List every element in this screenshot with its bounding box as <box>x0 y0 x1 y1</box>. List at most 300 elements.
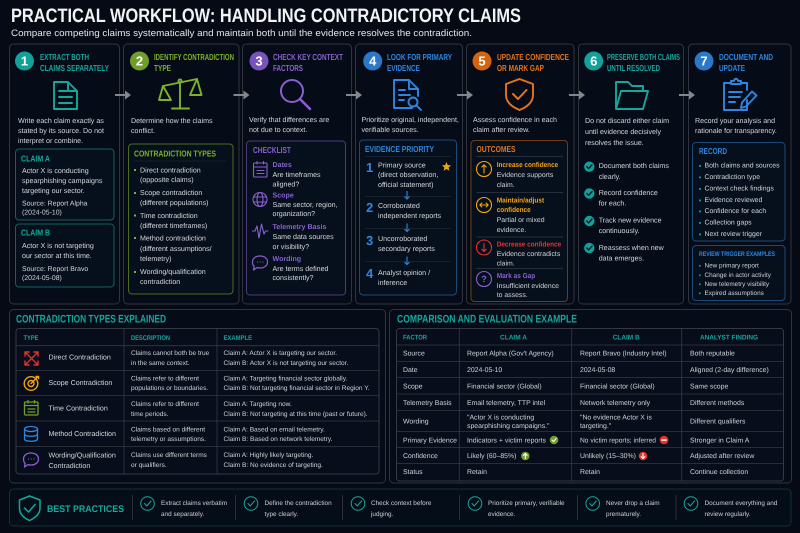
checklist item: record <box>584 188 658 208</box>
checklist scope: Same sector, region, <box>272 201 338 209</box>
step 7 description: Record your analysis and <box>695 117 775 125</box>
step 3 heading <box>273 52 343 73</box>
practice 2 <box>244 497 332 518</box>
checklist scope: organization? <box>272 210 315 218</box>
step 1 number badge: 1 <box>21 54 28 69</box>
priority 4: 4 <box>366 266 374 281</box>
card: record: Evidence reviewed <box>704 197 763 204</box>
outcome mark as gap <box>476 272 559 299</box>
row: source: Source <box>403 351 425 358</box>
practice 4: evidence. <box>488 511 516 518</box>
step 4 heading: LOOK FOR PRIMARY <box>387 52 452 62</box>
panel: contradiction types explained <box>10 310 386 483</box>
step 1 description <box>18 117 104 145</box>
row: direct contradiction: in the same context. <box>131 360 190 367</box>
card: claim B: our sector at this time. <box>22 252 92 260</box>
card: outcomes: OUTCOMES <box>476 144 516 154</box>
outcome maintain confidence <box>476 196 545 234</box>
table header: TYPE <box>24 335 39 342</box>
practice 2: Define the contradiction <box>264 500 332 507</box>
priority 2: 2 <box>366 200 373 215</box>
icon: green up arrow <box>521 452 530 460</box>
arrow: step 2 to 3 <box>234 90 250 100</box>
section heading: CONTRADICTION TYPES EXPLAINED <box>16 314 166 326</box>
title: PRACTICAL WORKFLOW: HANDLING CONTRADICTORY CLAIMS <box>11 5 521 27</box>
checklist telemetry basis: Telemetry Basis <box>272 223 326 231</box>
row: scope: Same scope <box>690 384 728 390</box>
arrow: step 4 to 5 <box>457 90 473 100</box>
row: telemetry basis: Network telemetry only <box>580 400 651 407</box>
table header: FACTOR <box>403 334 427 342</box>
row: scope contradiction: Scope Contradiction <box>48 379 112 387</box>
step 1 number badge <box>15 52 34 70</box>
card: record <box>692 142 785 241</box>
checklist dates <box>272 161 321 188</box>
row: confidence <box>403 453 754 460</box>
row: scope contradiction: populations or boundaries. <box>131 385 208 392</box>
row: date: Aligned (2-day difference) <box>690 367 769 374</box>
row: scope: Scope <box>403 384 423 390</box>
practice 6: Document everything and <box>704 500 778 507</box>
step 5 number badge <box>472 52 492 70</box>
icon: shield check <box>506 79 533 110</box>
step 6 description: until evidence decisively <box>585 128 662 136</box>
card: record: Contradiction type <box>704 174 760 181</box>
row: primary evidence: Stronger in Claim A <box>690 437 750 444</box>
outcome mark as gap: Mark as Gap <box>497 272 536 280</box>
row: wording contradiction: or qualifiers. <box>131 462 167 469</box>
outcome decrease confidence: claim. <box>497 260 515 268</box>
card: claim A: Actor X is conducting <box>22 167 89 175</box>
icon: green check <box>550 436 558 444</box>
step 3 number badge <box>250 52 268 70</box>
step 4 heading: EVIDENCE <box>387 63 420 73</box>
step 5 description <box>473 116 557 134</box>
outcome increase confidence: Evidence supports <box>497 172 554 179</box>
arrow: step 6 to 7 <box>679 90 695 100</box>
row: wording contradiction <box>48 452 323 470</box>
row: wording contradiction: Claim A: Highly likely targeting. <box>224 452 314 459</box>
step 6 heading: UNTIL RESOLVED <box>607 63 660 73</box>
priority 1: Primary source <box>378 162 426 170</box>
section heading: COMPARISON AND EVALUATION EXAMPLE <box>397 314 577 326</box>
row: wording contradiction: Claim B: No evidence of targeting. <box>224 462 323 469</box>
checklist wording <box>272 255 329 282</box>
priority 1: official statement) <box>378 181 433 189</box>
practice 3: judging. <box>370 511 394 518</box>
practice 3: Check context before <box>371 500 432 507</box>
card: outcomes <box>471 140 568 302</box>
practice 5: prematurely. <box>606 511 641 518</box>
card: checklist <box>246 141 346 295</box>
icon: best practices shield <box>20 496 40 520</box>
panel: step 6 preserve both claims <box>578 44 684 304</box>
table header: ANALYST FINDING <box>700 334 758 342</box>
card: record: Context check findings <box>704 186 774 192</box>
row: source <box>403 351 735 358</box>
icon: direct contradiction <box>25 352 38 365</box>
checklist wording: consistently? <box>272 274 314 282</box>
practice 6 <box>684 497 778 518</box>
step 3 description <box>249 116 329 134</box>
arrow down <box>404 191 410 199</box>
checklist item: reassess: Reassess when new <box>599 244 665 252</box>
icon: document with magnifier <box>394 80 421 110</box>
outcome maintain confidence: Maintain/adjust <box>497 196 545 204</box>
row: method contradiction <box>48 426 333 443</box>
step 2 description: conflict. <box>131 127 155 135</box>
step 2 heading: TYPE <box>154 63 171 73</box>
icon: magnifier <box>281 80 310 109</box>
practice 4 <box>468 497 565 518</box>
practice 3 <box>351 497 432 518</box>
outcome maintain confidence: Partial or mixed <box>497 217 545 224</box>
row: method contradiction: telemetry or assumptions. <box>131 436 206 443</box>
priority 4: inference <box>378 279 407 287</box>
row: primary evidence: Primary Evidence <box>403 437 457 444</box>
card: contradiction types: Time contradiction <box>140 212 198 220</box>
row: primary evidence: No victim reports; inferred <box>580 437 656 444</box>
card: review trigger examples: New primary report <box>704 262 759 270</box>
priority 2: Corroborated <box>378 202 420 210</box>
subtitle: Compare competing claims systematically and maintain both until the evidence resolves the contradiction. <box>11 28 472 38</box>
checklist telemetry basis <box>272 223 334 251</box>
table header <box>24 335 252 342</box>
card: record: Both claims and sources <box>704 163 780 170</box>
step 6 description <box>585 117 669 147</box>
outcome increase confidence: claim. <box>497 182 515 189</box>
priority 3 <box>366 233 435 253</box>
practice 5: Never drop a claim <box>606 500 660 507</box>
row: date <box>403 367 769 374</box>
row: scope contradiction: Claim B: Not targeting financial sector in Region Y. <box>224 385 370 392</box>
icon: globe <box>253 192 267 206</box>
icon: calendar <box>254 162 267 177</box>
step 6 number badge <box>584 52 603 70</box>
card: claim A: (2024-05-10) <box>22 210 62 216</box>
step 6 description: resolves the issue. <box>585 139 644 147</box>
row: method contradiction: Claim B: Based on network telemetry. <box>224 436 333 443</box>
icon: folder <box>616 82 648 109</box>
card: contradiction types: (different populations) <box>140 199 208 207</box>
row: direct contradiction: Claim A: Actor X is targeting our sector. <box>224 350 337 357</box>
outcome decrease confidence: Decrease confidence <box>497 240 561 248</box>
priority 4: Analyst opinion / <box>378 269 430 277</box>
practice 1: Extract claims verbatim <box>161 500 227 507</box>
checklist item: document: Document both claims <box>599 162 669 170</box>
card: record: Next review trigger <box>704 231 763 238</box>
row: method contradiction: Claims based on different <box>131 426 205 434</box>
card: claim A: targeting our sector. <box>22 187 85 195</box>
step 4 description: verifiable sources. <box>362 126 419 134</box>
card: record: Collection gaps <box>704 220 752 226</box>
checklist wording: Are terms defined <box>272 265 329 273</box>
step 4 description: Prioritize original, independent, <box>362 116 459 124</box>
step 2 heading <box>154 52 234 73</box>
priority 1: (direct observation, <box>378 171 438 179</box>
row: date: 2024-05-10 <box>467 367 502 374</box>
row: time contradiction <box>48 401 368 418</box>
row: method contradiction: Claim A: Based on email telemetry. <box>224 426 325 434</box>
step 1 heading <box>40 52 109 73</box>
arrow down <box>404 256 410 264</box>
row: time contradiction: Time Contradiction <box>48 404 108 412</box>
row: scope contradiction <box>48 376 370 392</box>
row: confidence: Likely (60–85%) <box>467 453 516 460</box>
row: time contradiction: time periods. <box>131 411 169 418</box>
card: claim B: CLAIM B <box>21 228 50 238</box>
priority 2: independent reports <box>378 212 442 220</box>
card: contradiction types: Wording/qualification <box>140 268 206 276</box>
priority 4 <box>366 266 430 287</box>
card: evidence priority <box>360 140 456 295</box>
checklist item: record: for each. <box>599 200 626 208</box>
step 4 description <box>362 116 459 134</box>
row: status <box>403 469 748 476</box>
step 5 heading: UPDATE CONFIDENCE <box>497 52 569 62</box>
row: source: Report Alpha (Gov't Agency) <box>467 351 554 358</box>
icon: star <box>442 162 451 171</box>
card: review trigger examples: REVIEW TRIGGER EXAMPLES <box>699 251 775 258</box>
row: scope: Financial sector (Global) <box>580 384 655 390</box>
row: direct contradiction: Direct Contradiction <box>48 354 111 362</box>
checklist scope: Scope <box>272 192 294 200</box>
card: contradiction types: (different assumptions/ <box>140 245 212 253</box>
step 3 heading: CHECK KEY CONTEXT <box>273 52 343 62</box>
outcome mark as gap: ? <box>481 274 487 284</box>
step 2 heading: IDENTIFY CONTRADICTION <box>154 52 234 62</box>
checklist item: document <box>584 162 669 181</box>
step 3 number badge: 3 <box>255 54 263 69</box>
table header: CLAIM A <box>500 334 527 342</box>
checklist dates: Dates <box>272 161 292 169</box>
step 1 description: stated by its source. Do not <box>18 127 104 135</box>
arrow: step 3 to 4 <box>346 90 362 100</box>
card: record: Confidence for each <box>704 208 766 215</box>
row: confidence: Confidence <box>403 453 438 460</box>
card: claim A: Source: Report Alpha <box>22 200 88 208</box>
step 7 heading <box>719 52 773 73</box>
outcome decrease confidence <box>476 240 561 268</box>
row: wording <box>403 414 746 430</box>
best practices heading: BEST PRACTICES <box>47 504 125 515</box>
panel: best practices <box>10 489 791 526</box>
priority 1 <box>366 160 438 189</box>
row: time contradiction: Claim B: Not targeting at this time (past or future). <box>224 411 368 418</box>
card: contradiction types: (different timeframes) <box>140 222 207 230</box>
row: confidence: Adjusted after review <box>690 453 754 460</box>
row: wording: spearphishing campaigns." <box>467 423 550 430</box>
row: telemetry basis: Different methods <box>690 400 745 407</box>
checklist item: record: Record confidence <box>599 189 658 197</box>
practice 4: Prioritize primary, verifiable <box>488 500 565 507</box>
row: direct contradiction: Claim B: Actor X is not targeting our sector. <box>224 360 348 367</box>
outcome maintain confidence: evidence. <box>497 227 526 234</box>
icon: wording speech bubble <box>24 453 38 467</box>
table: contradiction types <box>16 328 379 474</box>
table: comparison <box>396 328 784 481</box>
card: contradiction types: contradiction <box>140 278 180 286</box>
card: claim B: (2024-05-08) <box>22 275 62 282</box>
step 7 number badge: 7 <box>700 54 708 69</box>
card: review trigger examples: New telemetry visibility <box>704 281 770 288</box>
row: telemetry basis: Telemetry Basis <box>403 400 452 407</box>
table header: DESCRIPTION <box>131 335 170 342</box>
card: review trigger examples: Change in actor activity <box>704 272 772 279</box>
practice 5 <box>586 497 660 518</box>
card: contradiction types <box>128 144 233 294</box>
card: claim A <box>16 149 114 220</box>
row: confidence: Unlikely (15–30%) <box>580 453 636 460</box>
step 7 number badge <box>694 52 714 70</box>
row: primary evidence: Indicators + victim reports <box>467 437 547 444</box>
card: contradiction types: Direct contradiction <box>140 166 201 174</box>
arrow: step 1 to 2 <box>115 90 131 100</box>
checklist dates: aligned? <box>272 180 299 188</box>
row: primary evidence <box>403 437 750 444</box>
row: time contradiction: Claims refer to different <box>131 401 199 408</box>
row: date: 2024-05-08 <box>580 367 615 374</box>
card: contradiction types: Method contradiction <box>140 234 206 242</box>
panel: step 1 extract both claims <box>10 44 120 304</box>
step 2 description <box>131 117 213 135</box>
checklist telemetry basis: or visibility? <box>272 243 309 251</box>
card: claim B: Actor X is not targeting <box>22 242 94 250</box>
panel: step 7 document and update <box>688 44 791 304</box>
row: direct contradiction <box>48 350 348 367</box>
row: wording contradiction: Claims use different terms <box>131 452 208 459</box>
step 3 heading: FACTORS <box>273 63 303 73</box>
panel: step 3 check key context factors <box>242 44 352 304</box>
step 3 description: Verify that differences are <box>249 116 329 124</box>
row: scope: Financial sector (Global) <box>467 384 542 390</box>
row: direct contradiction: Claims cannot both be true <box>131 350 210 357</box>
row: wording contradiction: Wording/Qualification <box>48 452 116 460</box>
checklist item: track <box>584 216 662 235</box>
row: wording: Wording <box>403 418 429 425</box>
outcome decrease confidence: Evidence contradicts <box>497 251 561 258</box>
card: contradiction types: Scope contradiction <box>140 189 202 197</box>
practice 1 <box>141 497 227 518</box>
practice 6: review regularly. <box>704 511 751 518</box>
card: contradiction types: (opposite claims) <box>140 176 194 184</box>
panel: step 5 update confidence <box>466 44 574 304</box>
row: status: Continue collection <box>690 469 748 476</box>
icon: telemetry wave <box>252 224 268 238</box>
step 4 number badge: 4 <box>369 54 377 69</box>
row: status: Status <box>403 469 423 476</box>
row: scope contradiction: Claim A: Targeting financial sector globally. <box>224 376 348 382</box>
checklist item: reassess: data emerges. <box>599 254 644 262</box>
row: time contradiction: Claim A: Targeting now. <box>224 401 292 408</box>
icon: red down arrow <box>639 452 647 460</box>
icon: method database <box>24 426 38 441</box>
step 4 number badge <box>363 52 382 70</box>
row: scope <box>403 384 728 390</box>
checklist item: reassess <box>584 243 665 262</box>
step 7 heading: UPDATE <box>719 63 745 73</box>
panel: step 4 look for primary evidence <box>356 44 462 304</box>
card: contradiction types: CONTRADICTION TYPES <box>134 148 216 158</box>
card: claim B: Source: Report Bravo <box>22 266 88 273</box>
checklist item: document: clearly. <box>599 173 621 181</box>
row: wording: Different qualifiers <box>690 418 746 425</box>
step 1 heading: CLAIMS SEPARATELY <box>40 63 109 73</box>
step 5 heading: OR MARK GAP <box>497 63 544 73</box>
table header: CLAIM B <box>613 334 640 342</box>
outcome mark as gap: to assess. <box>497 292 528 299</box>
card: contradiction types: telemetry) <box>140 255 172 263</box>
card: record: RECORD <box>699 146 727 156</box>
row: wording contradiction: Contradiction <box>48 462 90 470</box>
card: claim B <box>16 224 114 287</box>
icon: red minus <box>660 436 668 444</box>
step 5 description: Assess confidence in each <box>473 116 557 124</box>
outcome mark as gap: Insufficient evidence <box>497 283 559 290</box>
panel: step 2 identify contradiction type <box>124 44 239 304</box>
row: date: Date <box>403 367 418 374</box>
row: source: Report Bravo (Industry Intel) <box>580 351 667 358</box>
step 1 description: Write each claim exactly as <box>18 117 104 125</box>
outcome maintain confidence: confidence <box>497 206 531 214</box>
priority 2 <box>366 200 442 220</box>
arrow down <box>404 224 410 232</box>
icon: scales <box>159 79 202 108</box>
icon: document <box>54 82 77 109</box>
card: claim A: spearphishing campaigns <box>22 177 103 185</box>
step 6 description: Do not discard either claim <box>585 117 669 125</box>
step 5 heading <box>497 52 569 73</box>
step 5 description: claim after review. <box>473 126 530 134</box>
practice 1: and separately. <box>161 511 204 518</box>
priority 3: Uncorroborated <box>378 235 427 243</box>
icon: speech bubble <box>252 256 268 270</box>
step 6 heading <box>607 52 680 73</box>
checklist scope <box>272 192 338 218</box>
step 6 number badge: 6 <box>590 54 597 69</box>
row: status: Retain <box>467 469 487 476</box>
icon: clipboard and pen <box>724 79 756 110</box>
step 1 heading: EXTRACT BOTH <box>40 52 89 62</box>
row: telemetry basis <box>403 400 745 407</box>
step 7 description: rationale for transparency. <box>695 127 777 135</box>
card: review trigger examples: Expired assumptions <box>704 290 764 297</box>
table header <box>403 334 758 342</box>
card: claim A: CLAIM A <box>21 154 50 164</box>
step 7 heading: DOCUMENT AND <box>719 52 773 62</box>
row: wording: "No evidence Actor X is <box>580 414 652 421</box>
step 2 number badge <box>130 52 149 70</box>
priority 3: secondary reports <box>378 245 435 253</box>
card: review trigger examples <box>692 246 785 300</box>
priority 3: 3 <box>366 233 373 248</box>
step 5 number badge: 5 <box>478 54 486 69</box>
outcome increase confidence <box>476 161 558 189</box>
panel: comparison and evaluation example <box>390 310 792 483</box>
step 2 number badge: 2 <box>136 54 143 69</box>
row: source: Both reputable <box>690 351 735 358</box>
table header: EXAMPLE <box>224 335 252 342</box>
step 7 description <box>695 117 777 135</box>
outcome increase confidence: Increase confidence <box>497 161 558 169</box>
checklist dates: Are timeframes <box>272 171 321 179</box>
checklist wording: Wording <box>272 255 301 263</box>
step 6 heading: PRESERVE BOTH CLAIMS <box>607 52 680 62</box>
row: wording: "Actor X is conducting <box>467 414 534 421</box>
card: evidence priority: EVIDENCE PRIORITY <box>365 144 434 154</box>
priority 1: 1 <box>366 160 373 175</box>
row: scope contradiction: Claims refer to different <box>131 376 199 382</box>
